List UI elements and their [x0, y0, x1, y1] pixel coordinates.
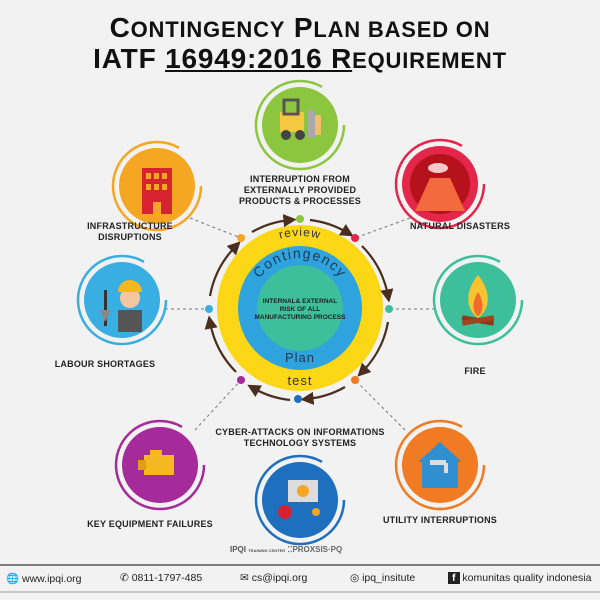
- label: interruption: EXTERNALLY PROVIDED: [244, 185, 356, 195]
- icon: house tap: [396, 421, 484, 509]
- center circle: RISK OF ALL: [280, 306, 320, 313]
- label: natural disasters: NATURAL DISASTERS: [410, 221, 510, 231]
- center circle: review: [279, 227, 320, 239]
- label: cyber: [215, 427, 385, 448]
- footer contacts: 🌐 www.ipqi.org: [6, 573, 82, 585]
- label: interruption: INTERRUPTION FROM: [250, 174, 350, 184]
- icon: computer: [256, 456, 344, 544]
- icon: worker: [78, 256, 166, 344]
- label: interruption: PRODUCTS & PROCESSES: [239, 196, 361, 206]
- cycle dots: [205, 215, 393, 403]
- footer lines: [0, 564, 600, 566]
- title: [93, 12, 507, 74]
- label: utility: UTILITY INTERRUPTIONS: [383, 515, 497, 525]
- logos: IPQI TRAINING CENTER ⁚⁚PROXSIS·PQ: [230, 545, 342, 554]
- title: CONTINGENCY PLAN BASED ON: [110, 12, 490, 43]
- center circle: Plan: [285, 350, 315, 365]
- label: fire: FIRE: [464, 366, 486, 376]
- icon: forklift: [256, 81, 344, 169]
- label: cyber: CYBER-ATTACKS ON INFORMATIONS: [215, 427, 385, 437]
- label: key equipment: KEY EQUIPMENT FAILURES: [87, 519, 213, 529]
- label: infrastructure: [87, 221, 173, 242]
- label: infrastructure: DISRUPTIONS: [98, 232, 162, 242]
- label: interruption: [239, 174, 361, 206]
- dashed connectors: [165, 218, 435, 430]
- label: labour: LABOUR SHORTAGES: [55, 359, 155, 369]
- email: ✉ cs@ipqi.org: [240, 572, 307, 584]
- instagram: ◎ ipq_insitute: [350, 572, 415, 584]
- label: cyber: TECHNOLOGY SYSTEMS: [244, 438, 356, 448]
- center circle: INTERNAL& EXTERNAL: [263, 298, 337, 305]
- center circle: test: [288, 373, 312, 388]
- label: infrastructure: INFRASTRUCTURE: [87, 221, 173, 231]
- center circle: MANUFACTURING PROCESS: [254, 314, 346, 321]
- facebook: f komunitas quality indonesia: [452, 572, 591, 584]
- center circle: [217, 225, 383, 391]
- icon: engine: [116, 421, 204, 509]
- icon: building: [113, 142, 201, 230]
- title: IATF 16949:2016 REQUIREMENT: [93, 43, 507, 74]
- icon: volcano: [396, 140, 484, 228]
- phone: ✆ 0811-1797-485: [120, 572, 202, 584]
- cycle arrows: [210, 220, 388, 400]
- icon: fire: [434, 256, 522, 344]
- center circle: Contingency: [254, 248, 346, 276]
